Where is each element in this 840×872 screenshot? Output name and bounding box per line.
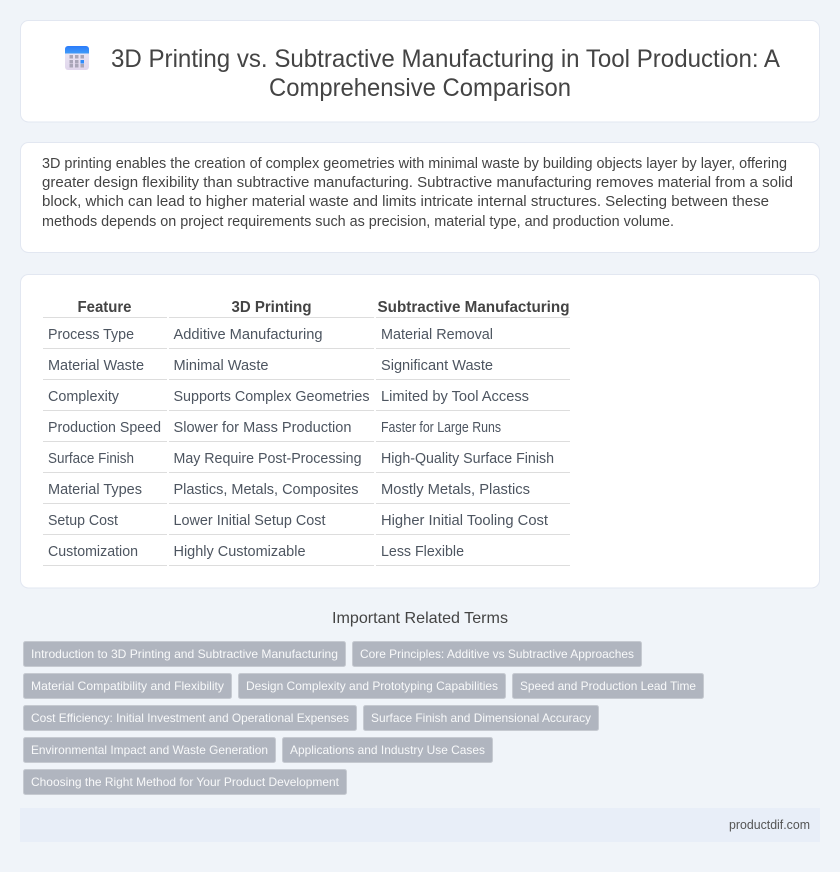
table row: setup cost: Lower Initial Setup Cost [174,513,326,529]
title: 3D Printing vs. Subtractive Manufacturing in Tool Production: A [111,45,780,73]
tag: material compatibility: Material Compatibility and Flexibility [31,679,224,693]
table row: customization: Highly Customizable [174,544,306,560]
table row: production speed [43,420,570,442]
table row: complexity [43,389,570,410]
title: Comprehensive Comparison [269,74,571,102]
footer [20,808,820,842]
tag: surface finish: Surface Finish and Dimensional Accuracy [371,711,591,725]
panel: comparison table [20,274,820,588]
tag: design complexity [238,674,506,698]
table row: customization: Less Flexible [381,544,464,560]
table row: material waste: Significant Waste [381,358,493,374]
table row: process type: Process Type [48,327,134,343]
table row: surface finish: May Require Post-Processing [174,451,362,467]
tag: introduction [24,642,346,666]
tag: cost efficiency [24,706,356,730]
table row: material types: Material Types [48,482,142,498]
table header: 3D Printing [232,299,312,316]
table row: process type: Material Removal [381,327,493,343]
table row: customization: Customization [48,544,138,560]
table header [43,299,570,318]
table row: material types: Mostly Metals, Plastics [381,482,530,498]
footer: productdif.com [729,817,810,832]
tag: environmental impact: Environmental Impact and Waste Generation [31,743,268,757]
title [111,45,780,102]
icon: calendar [65,46,89,70]
tag: applications [282,738,492,762]
table header: Feature [78,299,132,316]
text block: introduction paragraph: block, which can lead to higher material waste and limits intricate internal structures. Selecting between these [42,194,769,210]
panel: introduction [20,142,820,252]
tag: environmental impact [24,738,276,762]
tag: choosing method: Choosing the Right Method for Your Product Development [31,775,340,789]
tag: choosing method [24,770,346,794]
table row: setup cost: Setup Cost [48,513,118,529]
table row: production speed: Faster for Large Runs [381,420,501,436]
table row: customization [43,544,570,566]
text block: introduction paragraph: 3D printing enables the creation of complex geometries with minimal waste by building objects layer by layer, offering [42,156,787,172]
tag: cost efficiency: Cost Efficiency: Initial Investment and Operational Expenses [31,711,349,725]
table row: setup cost: Higher Initial Tooling Cost [381,513,548,529]
tag: design complexity: Design Complexity and Prototyping Capabilities [246,679,498,693]
table row: production speed: Slower for Mass Production [174,420,352,436]
table header: Subtractive Manufacturing [378,299,570,316]
tag: applications: Applications and Industry Use Cases [290,743,485,757]
table row: surface finish: Surface Finish [48,451,134,467]
tag: core principles [352,642,642,666]
tag: material compatibility [24,674,232,698]
table row: surface finish: High-Quality Surface Finish [381,451,554,467]
tag group: related terms [24,642,704,794]
table row: surface finish [43,451,570,472]
panel: title header [20,20,820,122]
table row: production speed: Production Speed [48,420,161,436]
table row: complexity: Supports Complex Geometries [174,389,370,405]
table row: material types: Plastics, Metals, Composites [174,482,358,498]
table row: complexity: Limited by Tool Access [381,389,529,405]
table row: complexity: Complexity [48,389,120,405]
table row: process type: Additive Manufacturing [174,327,322,343]
tag: introduction: Introduction to 3D Printing and Subtractive Manufacturing [31,647,338,661]
table row: material waste: Material Waste [48,358,144,374]
tag: surface finish [364,706,598,730]
heading: important related terms: Important Related Terms [332,610,508,627]
text block: introduction paragraph: greater design flexibility than subtractive manufacturing. Subtractive manufacturing removes material from a solid [42,175,793,191]
tag: core principles: Core Principles: Additive vs Subtractive Approaches [360,647,634,661]
table row: material waste: Minimal Waste [174,358,268,374]
tag: speed [512,674,704,698]
table row: material types [43,482,570,504]
text block: introduction paragraph [42,156,793,230]
table row: setup cost [43,513,570,534]
table row: process type [43,327,570,348]
text block: introduction paragraph: methods depends on project requirements such as precision, material type, and production volume. [42,214,674,230]
tag: speed: Speed and Production Lead Time [520,679,696,693]
table row: material waste [43,358,570,380]
